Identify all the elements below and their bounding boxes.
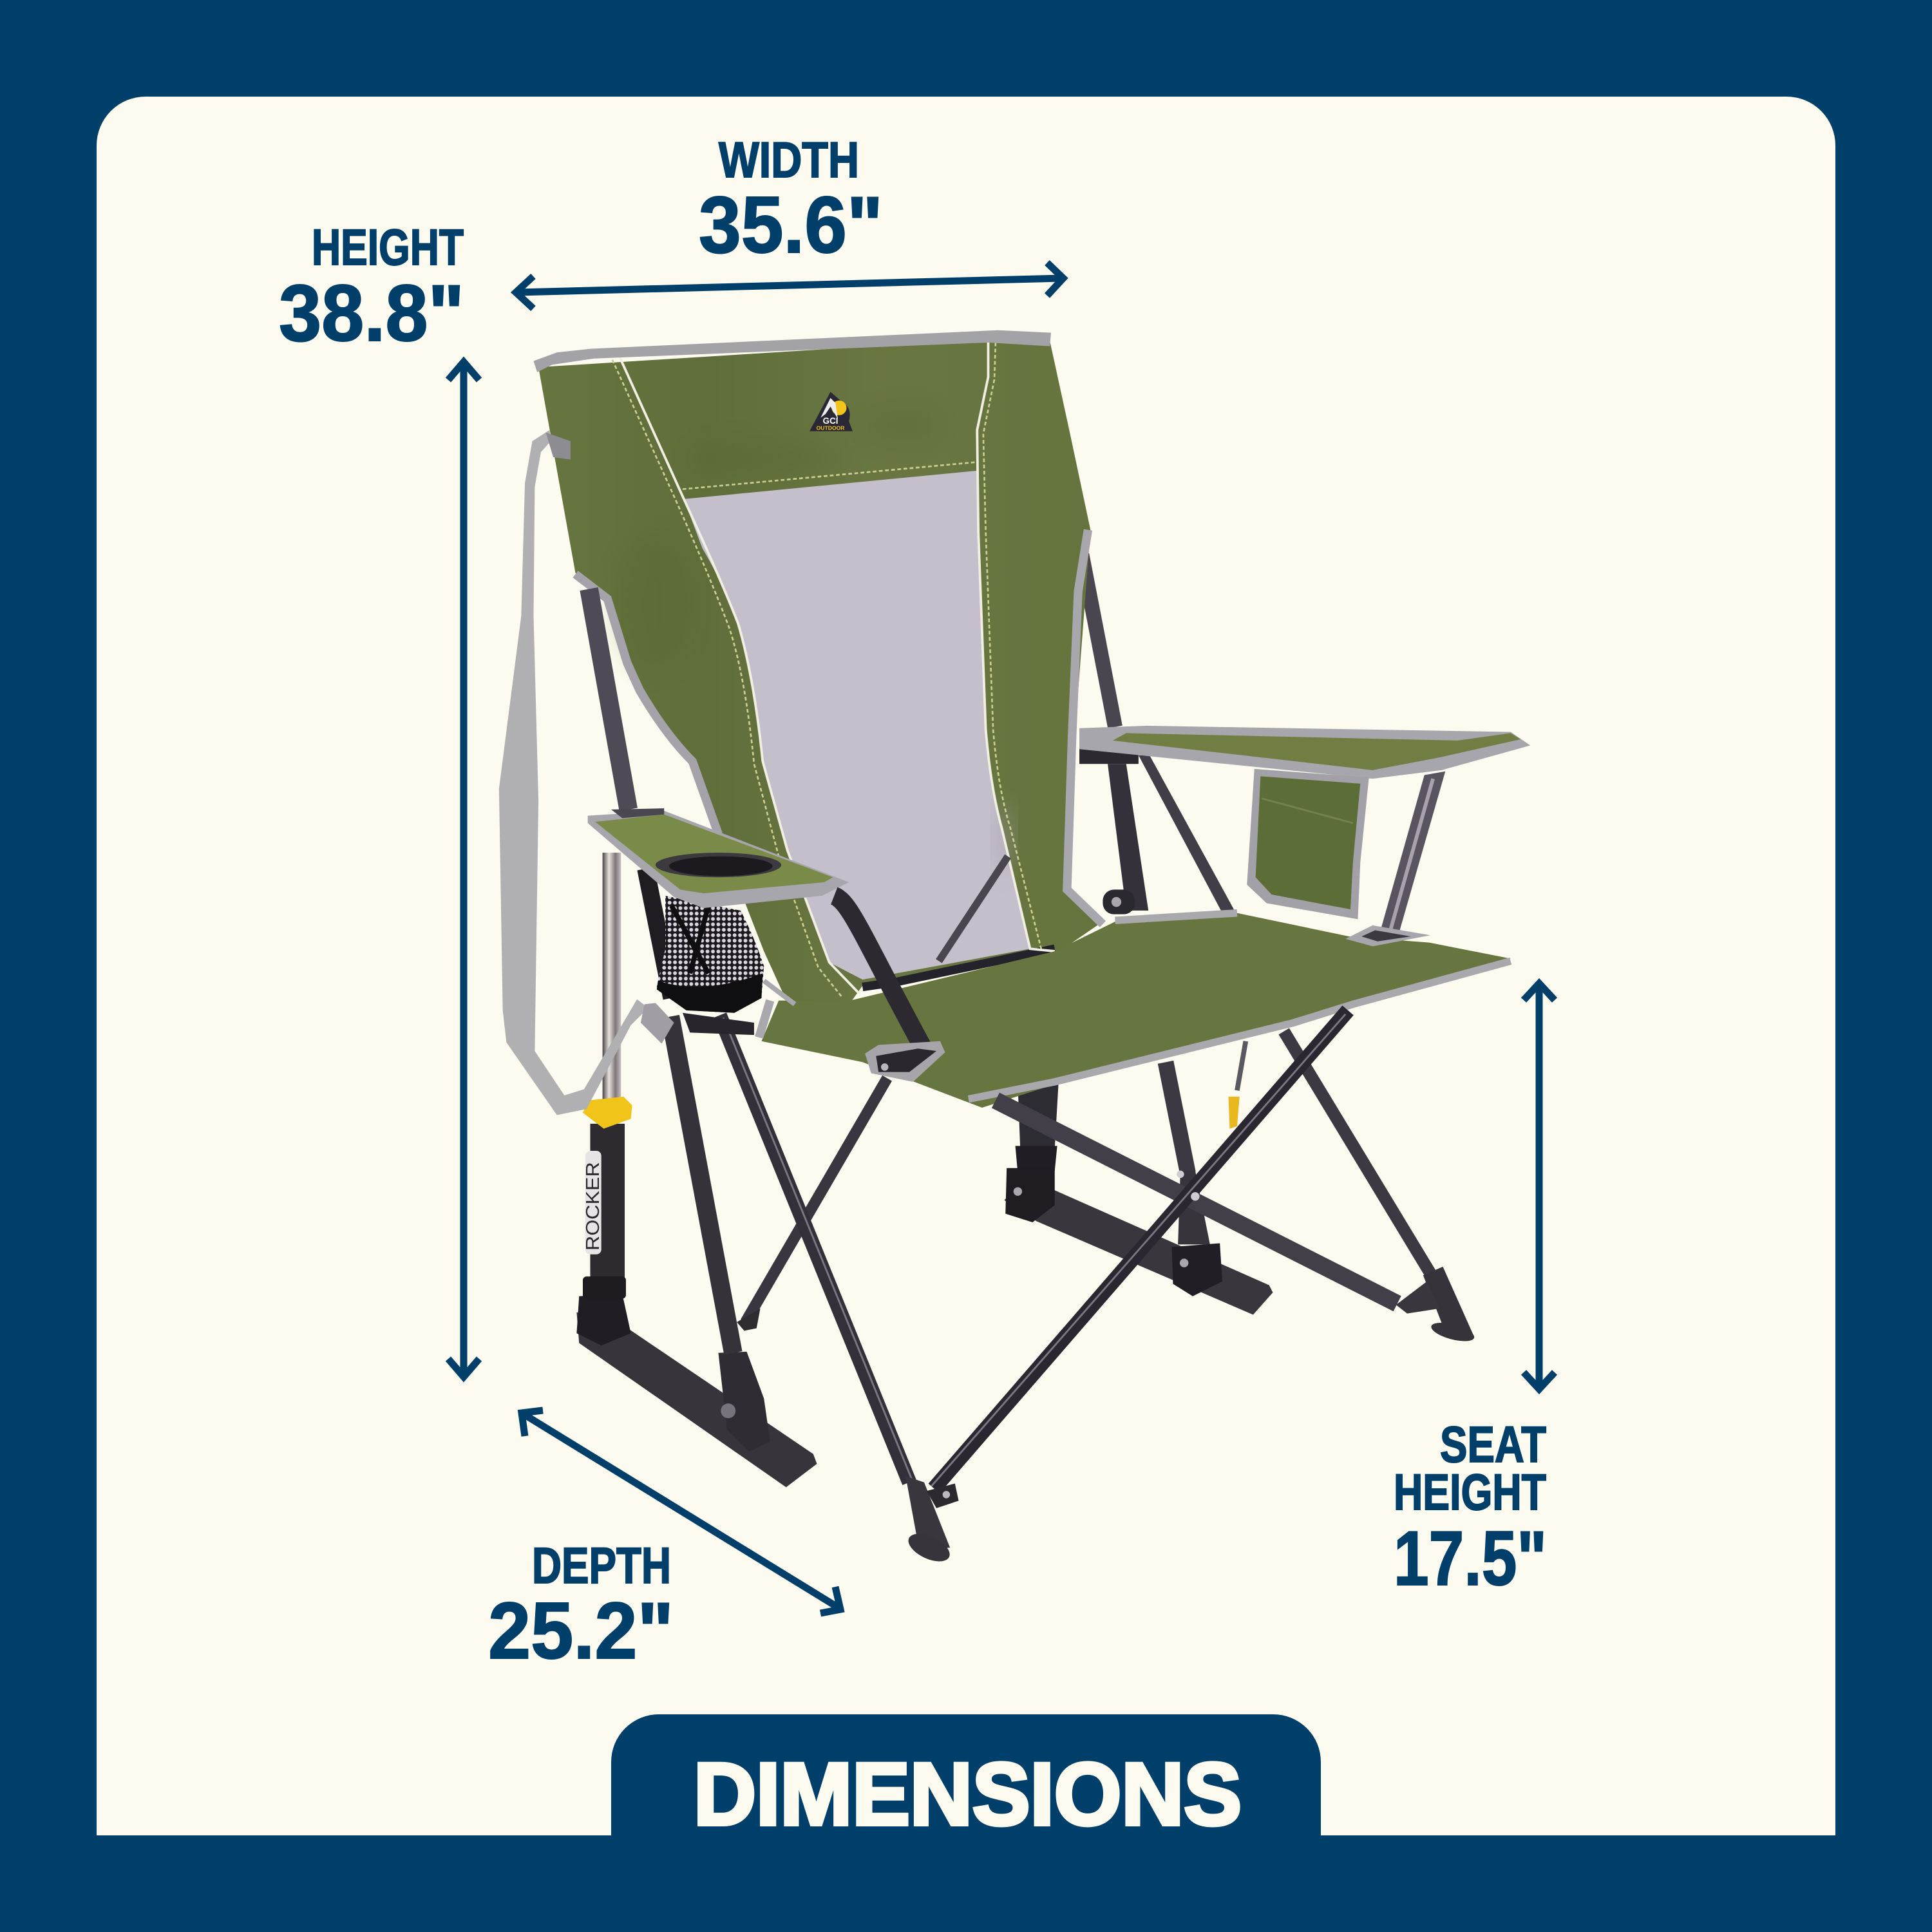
right arm post (1379, 772, 1445, 939)
mesh shading (996, 803, 1013, 873)
seat (759, 913, 1511, 1108)
rear upright tube right (1082, 554, 1115, 727)
dark strip below mesh (862, 949, 1055, 987)
title text: DIMENSIONS (694, 1745, 1242, 1844)
chair product illustration (499, 330, 1530, 1567)
label: depth: DEPTH (532, 1537, 671, 1594)
label: seat height (1394, 1416, 1547, 1602)
front foot (904, 1476, 959, 1567)
height arrow (448, 362, 479, 1377)
seat height arrow (1524, 983, 1555, 1389)
side pocket (1247, 769, 1369, 919)
label: width (699, 131, 883, 270)
label: height: 38.8" (279, 269, 464, 358)
ROCKER label: ROCKER (583, 1162, 603, 1251)
title tab (611, 1714, 1321, 1844)
rocker shock tube (583, 853, 632, 1299)
label: width: 35.6" (699, 181, 883, 270)
left rocker base (576, 1294, 817, 1487)
front right cross legs (931, 1010, 1397, 1488)
cup holder (656, 853, 781, 877)
logo badge: OUTDOOR (817, 425, 845, 431)
side bindings (576, 574, 718, 834)
left arm tube and seat bracket (834, 896, 945, 1082)
depth arrow (522, 1410, 840, 1613)
logo badge: GCI (823, 416, 838, 426)
top binding (533, 330, 1051, 372)
label: seat height: HEIGHT (1394, 1463, 1546, 1520)
back fabric (533, 330, 1103, 1005)
yellow collar (583, 1097, 632, 1129)
right armrest (1079, 726, 1530, 779)
left armrest (588, 808, 849, 908)
seams (612, 340, 1055, 998)
fabric shading (616, 405, 936, 672)
label: width: WIDTH (719, 131, 859, 188)
carry strap (499, 430, 674, 1115)
cup net holder (657, 896, 764, 1013)
label: seat height: SEAT (1440, 1416, 1546, 1473)
mesh panel (684, 471, 1030, 980)
rear frame and rockers (737, 1031, 1476, 1345)
hinge (683, 1013, 754, 1035)
seat post loop (1345, 925, 1430, 946)
label: depth (488, 1537, 674, 1676)
left uprights (589, 589, 913, 1482)
width arrow (516, 263, 1063, 308)
label: height (279, 218, 464, 358)
right lower frame (1079, 748, 1236, 914)
tube behind mesh (939, 857, 1008, 961)
label: seat height: 17.5" (1394, 1515, 1547, 1602)
logo badge (810, 392, 853, 431)
label: depth: 25.2" (488, 1587, 674, 1676)
label: height: HEIGHT (312, 218, 464, 276)
